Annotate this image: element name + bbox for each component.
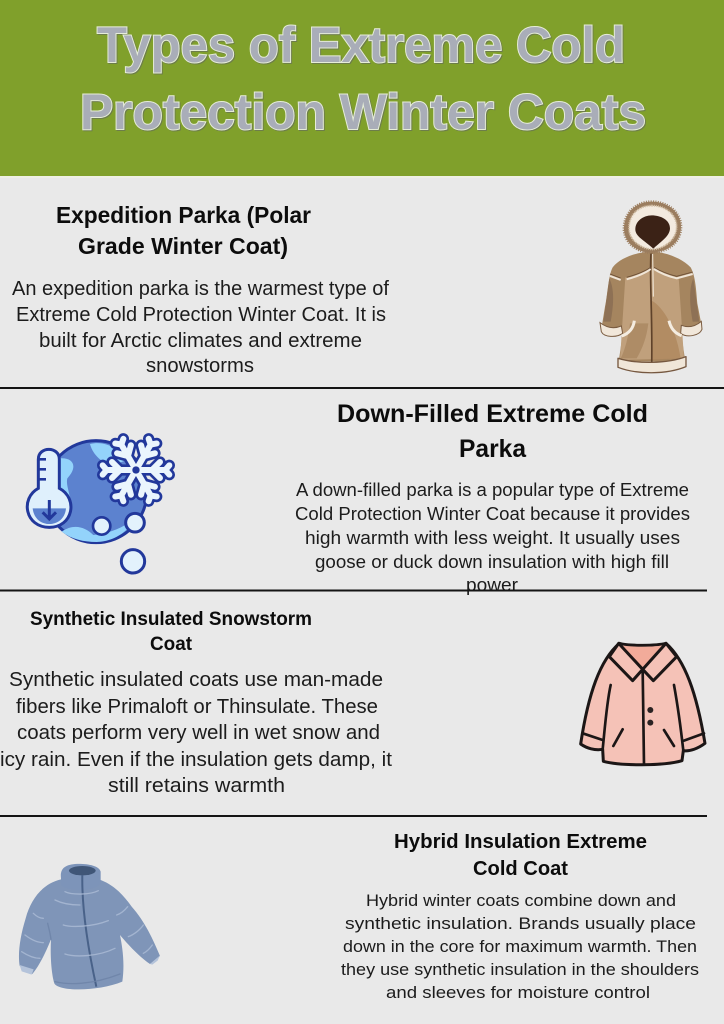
- heading: expedition parka: Expedition Parka (Polar: [56, 202, 311, 228]
- text: down-filled parka description: A down-filled parka is a popular type of Extreme: [296, 479, 689, 500]
- heading: expedition parka: [56, 202, 311, 259]
- text: synthetic insulated coat description: coats perform very well in wet snow and: [17, 722, 380, 744]
- text: hybrid insulation coat description: down in the core for maximum warmth. Then: [343, 937, 697, 956]
- title: [80, 17, 646, 140]
- panel: expedition parka: [12, 202, 702, 377]
- icon: blue puffer jacket: [19, 864, 160, 989]
- text: down-filled parka description: [295, 479, 690, 595]
- divider: [0, 590, 707, 592]
- heading: down-filled parka: Down-Filled Extreme Cold: [337, 400, 648, 428]
- divider: [0, 387, 724, 389]
- text: down-filled parka description: Cold Protection Winter Coat because it provides: [295, 503, 690, 524]
- title: Protection Winter Coats: [80, 84, 646, 140]
- text: hybrid insulation coat description: [341, 891, 699, 1002]
- text: synthetic insulated coat description: icy rain. Even if the insulation gets damp, it: [0, 749, 392, 771]
- text: hybrid insulation coat description: and sleeves for moisture control: [386, 983, 650, 1002]
- divider: [0, 815, 707, 817]
- heading: hybrid insulation coat: [394, 831, 647, 880]
- text: synthetic insulated coat description: still retains warmth: [108, 775, 285, 797]
- heading: synthetic insulated coat: Synthetic Insulated Snowstorm: [30, 608, 312, 630]
- heading: hybrid insulation coat: Hybrid Insulation Extreme: [394, 831, 647, 853]
- text: synthetic insulated coat description: Synthetic insulated coats use man-made: [9, 669, 383, 691]
- heading: down-filled parka: [337, 400, 648, 463]
- header band: [0, 0, 724, 178]
- text: expedition parka description: [12, 278, 389, 377]
- hood fur: [624, 202, 681, 253]
- text: synthetic insulated coat description: [0, 669, 392, 797]
- text: down-filled parka description: goose or duck down insulation with high fill: [315, 551, 669, 572]
- heading: expedition parka: Grade Winter Coat): [78, 233, 288, 259]
- icon: pink coat: [581, 643, 705, 765]
- text: expedition parka description: An expedition parka is the warmest type of: [12, 278, 389, 300]
- title: Types of Extreme Cold: [97, 17, 625, 73]
- text: down-filled parka description: power: [466, 574, 518, 595]
- panel: down-filled parka: [27, 400, 690, 595]
- heading: synthetic insulated coat: Coat: [150, 633, 192, 655]
- text: hybrid insulation coat description: synthetic insulation. Brands usually place: [345, 914, 696, 933]
- text: synthetic insulated coat description: fibers like Primaloft or Thinsulate. These: [16, 696, 378, 718]
- text: hybrid insulation coat description: Hybrid winter coats combine down and: [366, 891, 676, 910]
- panel: synthetic insulated coat: [0, 608, 705, 797]
- text: expedition parka description: snowstorms: [146, 355, 254, 377]
- text: down-filled parka description: high warmth with less weight. It usually uses: [305, 527, 680, 548]
- panel: hybrid insulation coat: [19, 831, 699, 1002]
- heading: hybrid insulation coat: Cold Coat: [473, 858, 568, 880]
- heading: synthetic insulated coat: [30, 608, 312, 655]
- text: hybrid insulation coat description: they use synthetic insulation in the shoulders: [341, 960, 699, 979]
- text: expedition parka description: Extreme Cold Protection Winter Coat. It is: [16, 304, 386, 326]
- icon: brown fur parka: [600, 202, 702, 373]
- text: expedition parka description: built for Arctic climates and extreme: [39, 330, 362, 352]
- icon: globe, thermometer and snowflake: [27, 437, 169, 573]
- heading: down-filled parka: Parka: [459, 435, 527, 463]
